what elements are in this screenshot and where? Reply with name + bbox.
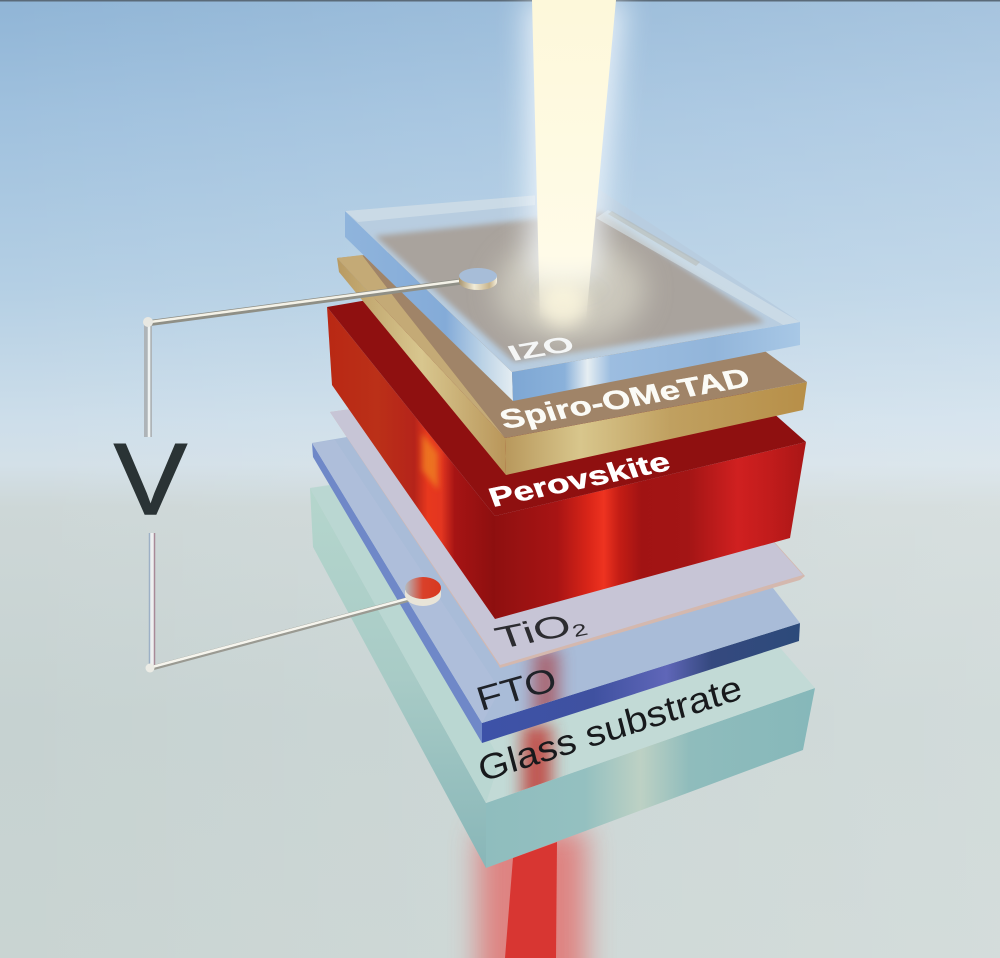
white light beam entering from the top (525, 0, 625, 327)
lower electrode wire and contact (146, 533, 441, 672)
layer: IZO (345, 190, 800, 401)
layer: Spiro-OMeTAD (337, 230, 807, 475)
layer: TiO2 (330, 370, 805, 668)
label: TiO2: 2 (569, 619, 590, 641)
layer: perovskite (327, 260, 806, 619)
label: Perovskite: Perovskite (484, 446, 674, 513)
label: FTO: FTO (472, 661, 561, 718)
label: Spiro-OMeTAD: Spiro-OMeTAD (495, 362, 754, 435)
red transmitted beam below the stack (478, 830, 586, 958)
label: TiO2: TiO (490, 612, 551, 656)
label: Glass substrate: Glass substrate (474, 667, 746, 789)
layer: glass substrate (310, 485, 815, 868)
layer: FTO (312, 437, 800, 743)
voltage label: V (114, 424, 187, 536)
upper electrode wire and contact (143, 268, 497, 437)
label: IZO: IZO (503, 332, 579, 365)
